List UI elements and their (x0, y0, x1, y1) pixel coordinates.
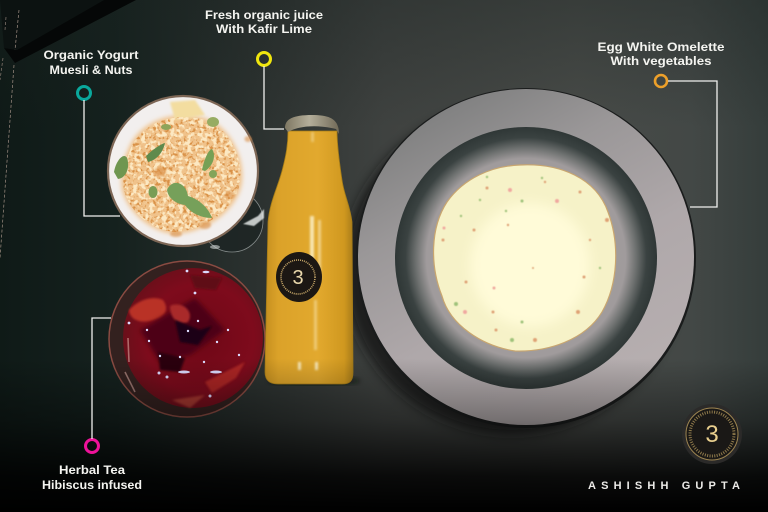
author name: ASHISHH GUPTA (588, 480, 740, 492)
muesli (121, 100, 252, 237)
plate (344, 88, 696, 434)
callout: herbal tea: Hibiscus infused (42, 478, 142, 492)
omelette (434, 165, 616, 351)
brand logo: 3 (705, 421, 719, 448)
callout: herbal tea: Herbal Tea (59, 463, 125, 477)
bottle cap (285, 115, 339, 134)
callout: fresh juice (205, 8, 323, 129)
mint leaves (114, 117, 219, 218)
callout: omelette (598, 40, 725, 207)
juice bottle (265, 115, 360, 385)
callout: omelette: With vegetables (610, 54, 712, 68)
callout: organic yogurt (44, 48, 139, 216)
bottle logo label (276, 252, 322, 302)
leather tray corner with stitching (0, 0, 136, 258)
bubbles (128, 270, 240, 398)
bottle highlights (298, 132, 321, 370)
callout: organic yogurt: Organic Yogurt (44, 48, 139, 62)
hibiscus tea glass (109, 261, 265, 417)
bottle logo label: 3 (292, 267, 304, 289)
brand logo (682, 404, 742, 464)
callout: organic yogurt: Muesli & Nuts (50, 63, 133, 77)
callout: omelette: Egg White Omelette (598, 40, 725, 54)
callout: fresh juice: Fresh organic juice (205, 8, 323, 22)
callout: fresh juice: With Kafir Lime (216, 22, 312, 36)
callout: herbal tea (42, 318, 142, 492)
hibiscus petals (129, 275, 245, 408)
yogurt glass (108, 96, 264, 252)
